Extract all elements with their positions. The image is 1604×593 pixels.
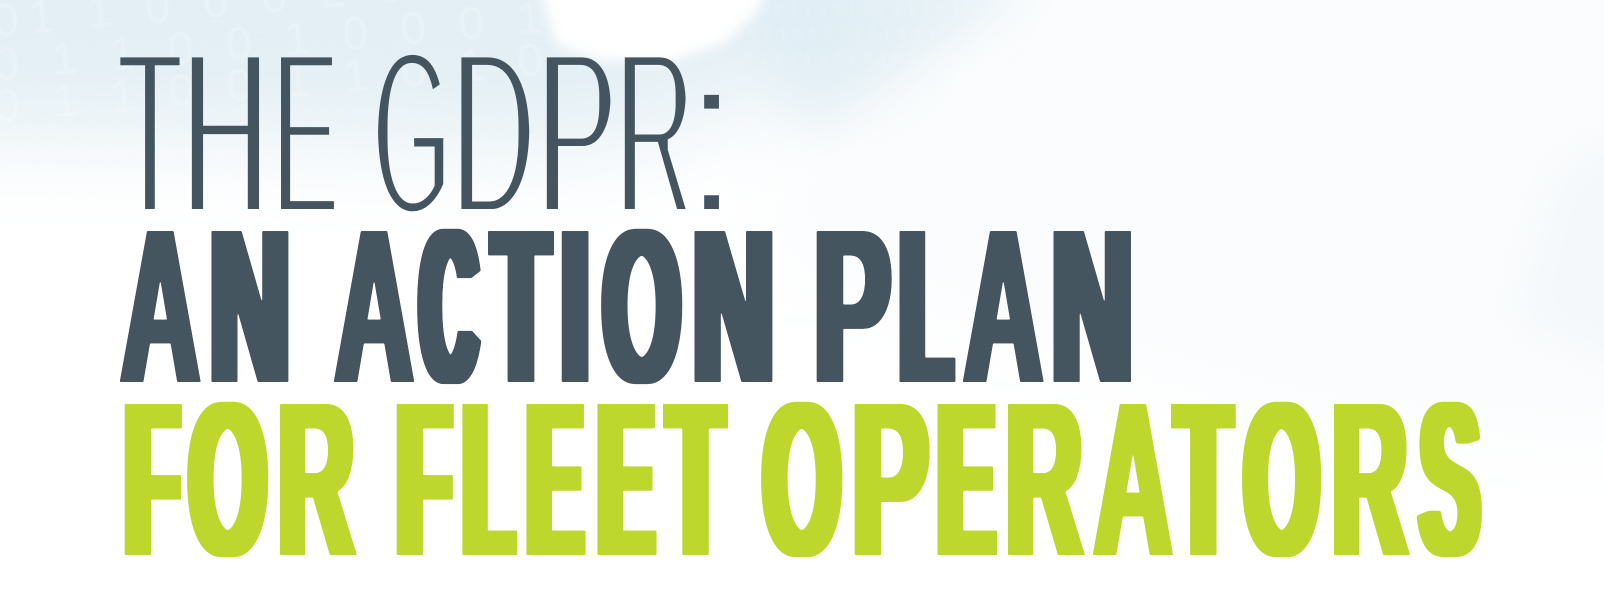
title line 2: AN ACTION PLAN: C (421, 183, 477, 429)
background: pale sky with binary digits: 0 1 1 0 1 0 0 1 0 1 0 1 (745, 50, 918, 65)
background: pale sky with binary digits: 1 0 0 1 0 1 0 1 1 0 1 0 0 1 (735, 26, 937, 41)
title line 2: AN ACTION PLAN: N (1052, 183, 1133, 429)
title line 1: THE GDPR:: G (372, 1, 450, 264)
title line 1: THE GDPR:: P (537, 1, 617, 264)
title line 2: AN ACTION PLAN: P (814, 183, 891, 429)
title line 1: THE GDPR:: : (690, 1, 733, 264)
title line 2: AN ACTION PLAN: L (900, 183, 950, 429)
title line 2: AN ACTION PLAN: N (693, 183, 774, 429)
title line 2: AN ACTION PLAN: A (121, 183, 200, 429)
title line 3: FOR FLEET OPERATORS (124, 356, 1482, 593)
title line 1: THE GDPR:: R (616, 1, 693, 264)
title line 1: THE GDPR:: H (182, 1, 269, 264)
title line 1: THE GDPR:: E (273, 1, 338, 264)
title line 1: THE GDPR:: D (452, 1, 535, 264)
background: pale sky with binary digits: 0 1 0 1 1 0 0 1 0 1 0 1 1 0 1 (745, 2, 962, 17)
title line 2: AN ACTION PLAN: I (557, 183, 594, 429)
background: pale sky with binary digits: 0 1 1 0 0 1 1 0 1 0 (0, 32, 555, 132)
title line 2: AN ACTION PLAN: A (964, 183, 1042, 429)
title line 2: AN ACTION PLAN (120, 183, 1476, 557)
title line 2: AN ACTION PLAN: O (603, 183, 681, 429)
title line 2: AN ACTION PLAN: A (335, 183, 413, 429)
title line 1: THE GDPR: (118, 1, 733, 264)
title line 2: AN ACTION PLAN: N (210, 183, 290, 429)
title line 1: THE GDPR:: T (118, 1, 182, 264)
title line 2: AN ACTION PLAN: T (494, 183, 548, 429)
